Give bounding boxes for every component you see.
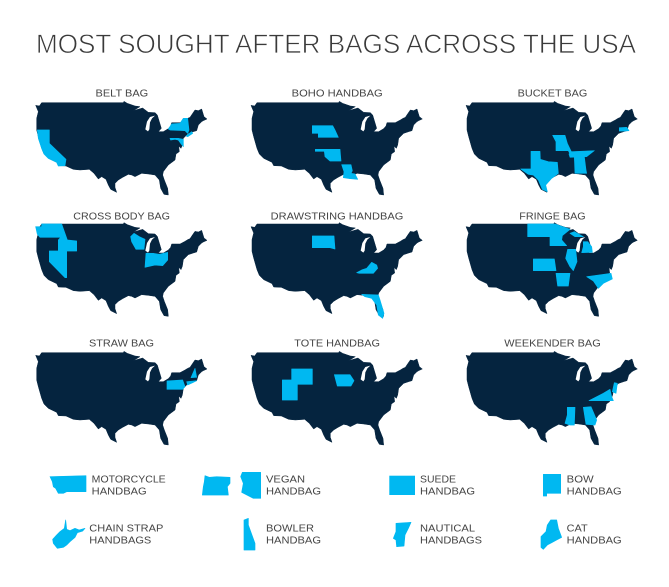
legend: vegan handbag (202, 472, 321, 498)
icon: west virginia (53, 520, 85, 548)
legend: bow handbag (543, 474, 622, 497)
heading: boho handbag: BOHO HANDBAG (292, 89, 383, 100)
map: fringe bag (466, 223, 637, 316)
label: nautical handbags: NAUTICAL (420, 523, 475, 534)
map: cross body bag (36, 223, 207, 316)
legend: chain strap handbags (53, 520, 164, 548)
icon: montana (50, 476, 86, 493)
label: nautical handbags: HANDBAGS (420, 535, 482, 546)
heading: straw bag: STRAW BAG (89, 339, 154, 350)
label: bow handbag: HANDBAG (567, 486, 622, 497)
icon: wyoming (389, 476, 415, 495)
icon: maine (541, 520, 562, 549)
label: chain strap handbags: CHAIN STRAP (89, 523, 164, 534)
panel: straw bag (36, 339, 207, 445)
label: suede handbag: SUEDE (420, 474, 456, 485)
label: bowler handbag: BOWLER (266, 523, 314, 534)
label: motorcycle handbag: HANDBAG (92, 486, 147, 497)
icon: oregon and arizona (202, 472, 261, 498)
label: bow handbag: BOW (567, 474, 594, 485)
map: boho handbag (251, 101, 422, 195)
legend: cat handbag (541, 520, 622, 549)
legend: nautical handbags (393, 522, 482, 547)
panel: fringe bag (466, 211, 637, 316)
icon: vermont (393, 522, 411, 547)
heading: bucket bag: BUCKET BAG (518, 89, 588, 100)
map: bucket bag (466, 101, 637, 195)
legend: bowler handbag (244, 518, 321, 550)
panel: bucket bag (466, 89, 637, 195)
panel: drawstring handbag (251, 211, 422, 318)
map: straw bag (36, 351, 207, 445)
panel: tote handbag (251, 339, 422, 445)
label: cat handbag: CAT (567, 523, 588, 534)
heading: fringe bag: FRINGE BAG (519, 211, 586, 222)
map: belt bag (36, 101, 207, 195)
panel: belt bag (36, 89, 207, 195)
map: tote handbag (251, 351, 422, 445)
label: bowler handbag: HANDBAG (266, 535, 321, 546)
heading: belt bag: BELT BAG (96, 89, 148, 100)
label: cat handbag: HANDBAG (567, 535, 622, 546)
heading: drawstring handbag: DRAWSTRING HANDBAG (271, 211, 404, 222)
legend: motorcycle handbag (50, 474, 166, 497)
map: drawstring handbag (251, 223, 422, 318)
panel: weekender bag (466, 339, 637, 445)
label: chain strap handbags: HANDBAGS (89, 535, 152, 546)
panel: boho handbag (251, 89, 422, 195)
icon: delaware (244, 518, 255, 550)
map: weekender bag (466, 351, 637, 445)
label: suede handbag: HANDBAG (420, 486, 475, 497)
heading: tote handbag: TOTE HANDBAG (294, 339, 380, 350)
label: motorcycle handbag: MOTORCYCLE (92, 474, 166, 485)
label: vegan handbag: VEGAN (266, 474, 305, 485)
icon: new mexico (543, 474, 561, 496)
title: MOST SOUGHT AFTER BAGS ACROSS THE USA (36, 29, 636, 59)
heading: cross body bag: CROSS BODY BAG (73, 211, 170, 222)
heading: weekender bag: WEEKENDER BAG (504, 339, 601, 350)
label: vegan handbag: HANDBAG (266, 486, 321, 497)
legend: suede handbag (389, 474, 475, 497)
panel: cross body bag (36, 211, 207, 316)
